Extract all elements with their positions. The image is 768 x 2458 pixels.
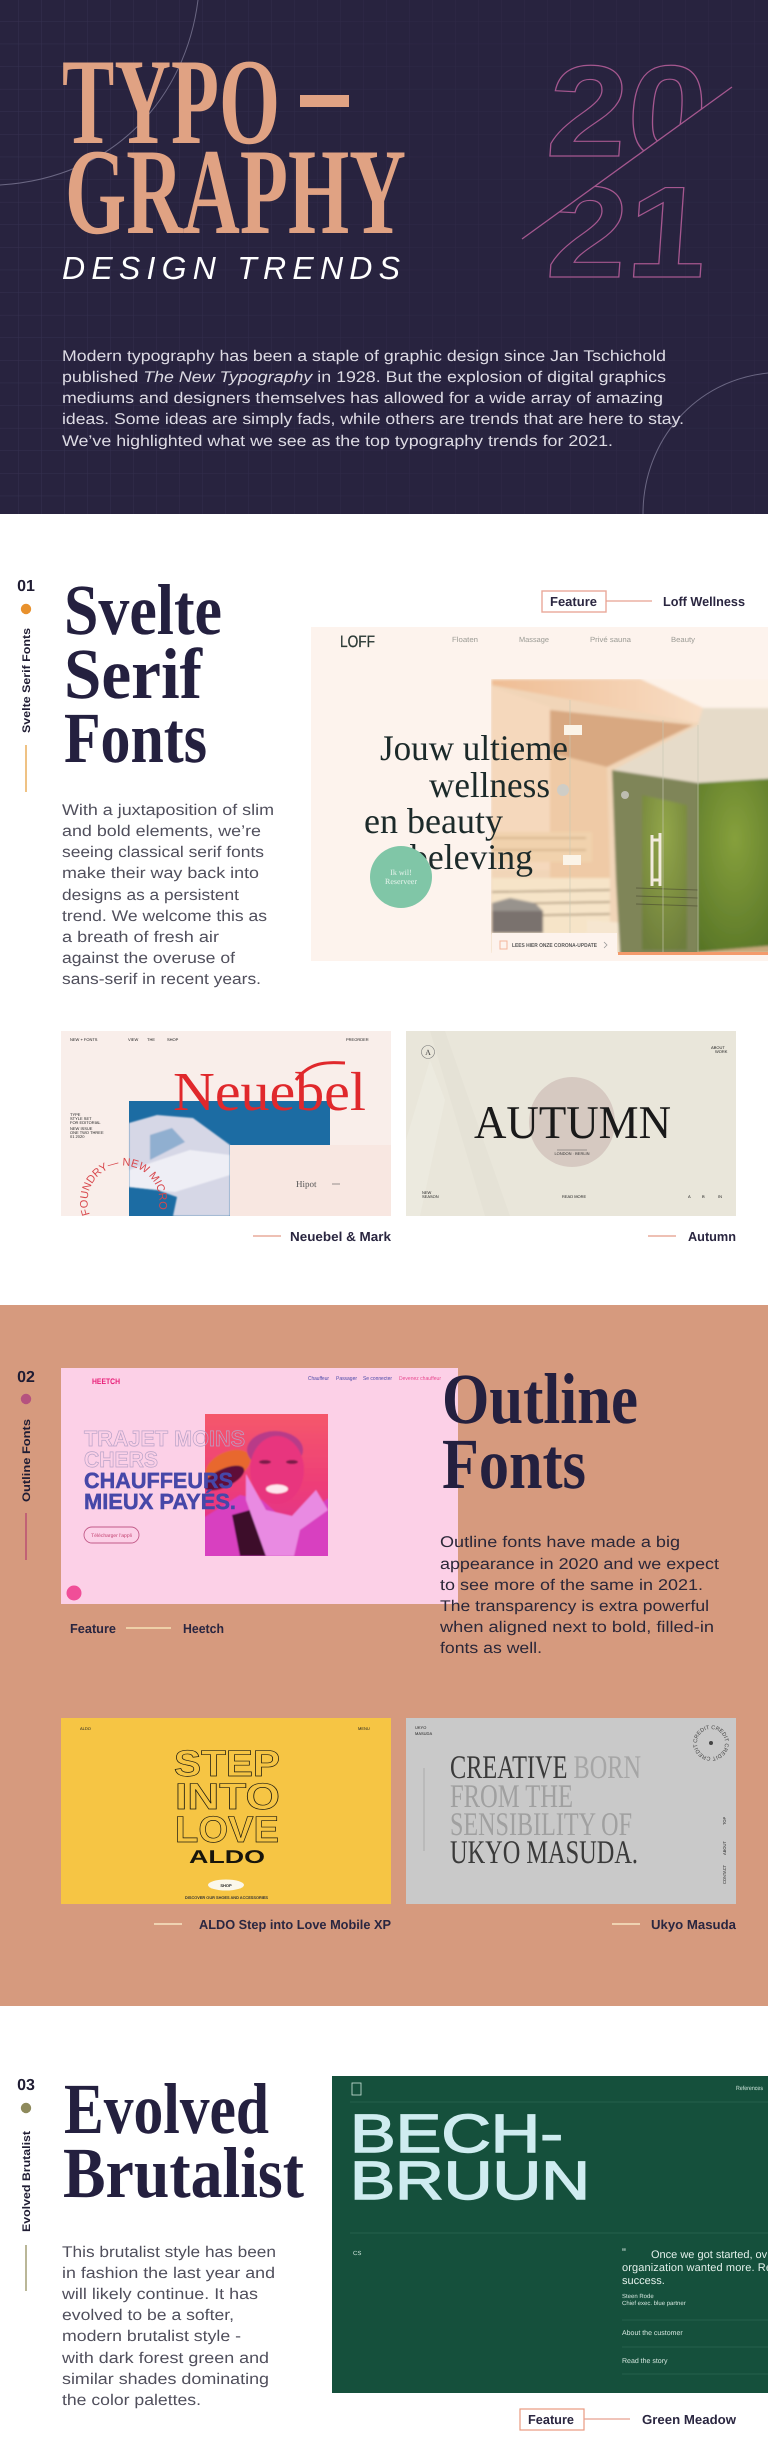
screenshot: autumn: AUTUMN	[474, 1097, 671, 1149]
body text: modern brutalist style -	[62, 2328, 241, 2345]
heading: Serif	[64, 634, 203, 714]
section 01: svelte serif fonts	[17, 570, 768, 1244]
download button: Télécharger l'appli	[91, 1533, 132, 1539]
caption: autumn: Autumn	[688, 1229, 736, 1244]
portrait photo	[205, 1414, 328, 1556]
logo and nav: Beauty	[671, 635, 695, 644]
body text	[439, 1534, 720, 1657]
screenshot: neuebel and mark: THE	[147, 1037, 155, 1042]
heading: Outline	[442, 1359, 638, 1439]
screenshot: ukyo masuda: UKYO MASUDA.	[450, 1835, 638, 1871]
heading: Fonts	[442, 1424, 586, 1504]
screenshot: green meadow: CS	[353, 2250, 361, 2257]
screenshot: neuebel and mark: PREORDER	[346, 1037, 369, 1042]
screenshot: green meadow: References	[736, 2085, 763, 2092]
screenshot: ukyo masuda: FROM THE	[450, 1779, 573, 1815]
subtitle: DESIGN TRENDS	[62, 250, 400, 286]
screenshot: ukyo masuda: CREATIVE BORN	[450, 1750, 641, 1786]
screenshot: ukyo masuda: SENSIBILITY OF	[450, 1807, 632, 1843]
body text: Outline fonts have made a big	[440, 1534, 680, 1551]
screenshot: ukyo masuda: TOP	[722, 1817, 727, 1825]
sidebar 03: 03	[17, 2077, 35, 2094]
screenshot: green meadow: Read the story	[622, 2357, 668, 2365]
heading	[442, 1359, 638, 1504]
screenshot: heetch: Se connecter	[363, 1376, 392, 1382]
sidebar 02	[17, 1369, 35, 1560]
body text: against the overuse of	[62, 950, 236, 967]
body text	[62, 802, 274, 988]
quote: "	[622, 2247, 626, 2259]
headline: jouw ultieme wellness	[364, 728, 568, 877]
screenshot: autumn: B	[702, 1194, 705, 1199]
screenshot: ukyo masuda	[406, 1718, 736, 1904]
feature label: heetch: Feature	[70, 1621, 116, 1636]
quote: success.	[622, 2275, 665, 2287]
screenshot: ukyo masuda: ABOUT	[722, 1841, 727, 1855]
notification bar: LEES HIER ONZE CORONA-UPDATE	[512, 943, 597, 949]
screenshot: heetch: HEETCH	[92, 1377, 120, 1386]
body text: appearance in 2020 and we expect	[440, 1556, 720, 1573]
body text: similar shades dominating	[62, 2371, 269, 2388]
headline: jouw ultieme wellness: en beauty	[364, 801, 503, 841]
screenshot: aldo step into love: ALDO	[189, 1846, 265, 1867]
feature label: loff wellness: Feature	[550, 594, 597, 609]
year outline 2020 and 2021 with slash: 21	[543, 159, 712, 305]
screenshot: heetch: Chauffeur	[308, 1376, 329, 1382]
sidebar 02: Outline Fonts	[21, 1419, 33, 1502]
big headline: BECH-	[350, 2104, 563, 2164]
screenshot: autumn: A	[688, 1194, 691, 1199]
body text: will likely continue. It has	[61, 2286, 258, 2303]
intro text	[62, 348, 684, 450]
logo and nav: LOFF	[340, 633, 375, 651]
body text: make their way back into	[62, 865, 259, 882]
body text: sans-serif in recent years.	[62, 971, 261, 988]
screenshot: heetch: Passager	[336, 1376, 357, 1382]
screenshot: green meadow: Steen Rode	[622, 2293, 654, 2300]
screenshot: neuebel and mark: NEW ISSUE	[70, 1126, 93, 1131]
filled headline: MIEUX PAYÉS.	[84, 1489, 236, 1514]
section 03: evolved brutalist	[18, 2076, 768, 2431]
screenshot: neuebel and mark: TYPE	[70, 1112, 81, 1117]
screenshot: ukyo masuda: MASUDA	[415, 1731, 432, 1736]
feature label: loff wellness	[542, 591, 745, 612]
reserve button	[370, 846, 432, 908]
outline headline: CHERS	[84, 1447, 158, 1472]
body text: trend. We welcome this as	[62, 908, 267, 925]
screenshot: aldo step into love: ALDO	[80, 1726, 91, 1731]
year outline 2020 and 2021 with slash	[522, 64, 732, 278]
quote: Once we got started, ov	[651, 2249, 768, 2261]
screenshot: neuebel and mark: VIEW	[128, 1037, 138, 1042]
filled headline: CHAUFFEURS	[84, 1468, 233, 1493]
screenshot: neuebel and mark	[61, 1031, 391, 1216]
screenshot: neuebel and mark: 01 2020	[70, 1134, 85, 1139]
caption: autumn	[648, 1229, 736, 1244]
body text: With a juxtaposition of slim	[62, 802, 274, 819]
screenshot: autumn: WORK	[715, 1049, 728, 1054]
screenshot: aldo step into love	[61, 1718, 391, 1904]
screenshot: loff wellness	[311, 627, 768, 961]
screenshot: ukyo masuda: CREDIT CREDIT CREDIT CREDIT	[693, 1725, 729, 1761]
screenshot: autumn: A	[425, 1048, 431, 1057]
screenshot: aldo step into love: INTO	[175, 1776, 280, 1817]
caption: ukyo masuda	[612, 1917, 737, 1932]
intro text: mediums and designers themselves has allowed for a wide array of amazing	[62, 390, 663, 407]
caption: neuebel and mark: Neuebel & Mark	[290, 1229, 392, 1244]
screenshot: heetch: Devenez chauffeur	[399, 1376, 441, 1382]
screenshot: aldo step into love: STEP	[174, 1743, 280, 1784]
snow photo	[129, 1115, 230, 1216]
heading	[63, 2069, 304, 2213]
screenshot: autumn: LONDON · BERLIN	[554, 1151, 590, 1156]
feature label: heetch: Heetch	[183, 1621, 224, 1636]
body text: fonts as well.	[440, 1640, 542, 1657]
heading: Fonts	[64, 698, 207, 778]
body text: This brutalist style has been	[62, 2244, 276, 2261]
body text: and bold elements, we’re	[62, 823, 261, 840]
logo and nav	[340, 633, 695, 651]
caption: ukyo masuda: Ukyo Masuda	[651, 1917, 737, 1932]
sidebar 01	[17, 578, 35, 792]
year outline 2020 and 2021 with slash: 20	[543, 38, 712, 184]
heading	[64, 570, 222, 778]
feature label: heetch	[70, 1621, 224, 1636]
feature label: green meadow: Green Meadow	[642, 2412, 737, 2427]
reserve button: Ik wil!	[390, 868, 412, 877]
body text: a breath of fresh air	[62, 929, 219, 946]
section 02: outline fonts	[0, 1305, 768, 2006]
sidebar 01: Svelte Serif Fonts	[21, 628, 33, 733]
screenshot: autumn: SEASON	[422, 1194, 439, 1199]
body text: seeing classical serif fonts	[62, 844, 264, 861]
body text: to see more of the same in 2021.	[440, 1577, 703, 1594]
screenshot: ukyo masuda: UKYO	[415, 1725, 426, 1730]
sauna photo	[491, 679, 768, 955]
title: typography: TYPO	[62, 33, 280, 170]
download button	[84, 1527, 139, 1543]
intro text: published The New Typography in 1928. But the explosion of digital graphics	[62, 369, 666, 386]
filled headline	[84, 1468, 236, 1514]
notification bar	[492, 933, 768, 955]
feature label: loff wellness: Loff Wellness	[663, 594, 745, 609]
quote	[622, 2247, 768, 2287]
reserve button: Reserveer	[385, 877, 417, 886]
title: typography	[62, 33, 406, 260]
body text: evolved to be a softer,	[62, 2307, 234, 2324]
sidebar 01: 01	[17, 578, 35, 595]
screenshot: aldo step into love: SHOP	[220, 1883, 232, 1888]
screenshot: neuebel and mark: Neuebel	[173, 1061, 366, 1122]
headline: jouw ultieme wellness: wellness	[429, 765, 550, 805]
heading: Evolved	[64, 2069, 269, 2149]
logo and nav: Massage	[519, 635, 549, 644]
feature label: green meadow	[520, 2409, 737, 2430]
heading: Brutalist	[63, 2133, 304, 2213]
screenshot: ukyo masuda: CONTACT	[722, 1864, 727, 1884]
screenshot: neuebel and mark: Hipot	[296, 1179, 317, 1189]
screenshot: autumn	[406, 1031, 736, 1216]
screenshot: aldo step into love: DISCOVER OUR SHOES AND ACCESSORIES	[185, 1895, 268, 1900]
feature label: green meadow: Feature	[528, 2412, 574, 2427]
headline: jouw ultieme wellness: beleving	[410, 837, 533, 877]
big headline	[354, 2114, 586, 2200]
hero panel	[0, 0, 768, 514]
screenshot: autumn: IN	[718, 1194, 722, 1199]
screenshot: neuebel and mark: FOR EDITORIAL	[70, 1120, 101, 1125]
sidebar 02: 02	[17, 1369, 35, 1386]
screenshot: aldo step into love: MENU	[358, 1726, 370, 1731]
circular text: Y FOUNDRY— NEW MICRO	[80, 1158, 167, 1216]
screenshot: green meadow: Chief exec. blue partner	[622, 2300, 686, 2307]
body text: The transparency is extra powerful	[440, 1598, 709, 1615]
big headline: BRUUN	[350, 2151, 590, 2211]
logo and nav: Privé sauna	[590, 635, 632, 644]
headline: jouw ultieme wellness: Jouw ultieme	[380, 728, 568, 768]
screenshot: autumn: READ MORE	[562, 1194, 587, 1199]
body text: when aligned next to bold, filled-in	[439, 1619, 714, 1636]
caption: aldo: ALDO Step into Love Mobile XP	[199, 1917, 391, 1932]
screenshot: neuebel and mark: STYLE SET	[70, 1116, 92, 1121]
body text: the color palettes.	[62, 2392, 201, 2409]
body text: designs as a persistent	[62, 887, 240, 904]
outline headline	[84, 1426, 245, 1472]
title: typography: GRAPHY	[65, 123, 406, 260]
intro text: ideas. Some ideas are simply fads, while others are trends that are here to stay.	[62, 411, 684, 428]
screenshot: neuebel and mark: ONE TWO THREE	[70, 1130, 104, 1135]
quote: organization wanted more. Re	[622, 2262, 768, 2274]
outline headline: TRAJET MOINS	[84, 1426, 245, 1451]
screenshot: autumn: NEW	[422, 1190, 432, 1195]
screenshot: aldo step into love: LOVE	[175, 1809, 279, 1850]
screenshot: autumn: ABOUT	[711, 1045, 725, 1050]
intro text: Modern typography has been a staple of graphic design since Jan Tschichold	[62, 348, 666, 365]
intro text: We’ve highlighted what we see as the top typography trends for 2021.	[62, 433, 613, 450]
screenshot: heetch	[61, 1368, 458, 1604]
body text: with dark forest green and	[61, 2350, 269, 2367]
logo and nav: Floaten	[452, 635, 478, 644]
body text	[61, 2244, 276, 2409]
screenshot: neuebel and mark: NEW + FONTS	[70, 1037, 98, 1042]
screenshot: green meadow: About the customer	[622, 2329, 683, 2337]
screenshot: neuebel and mark: SHOP	[167, 1037, 179, 1042]
sidebar 03	[17, 2077, 35, 2291]
body text: in fashion the last year and	[62, 2265, 275, 2282]
sidebar 03: Evolved Brutalist	[21, 2131, 33, 2232]
heading: Svelte	[64, 570, 222, 650]
screenshot: green meadow	[332, 2076, 768, 2393]
